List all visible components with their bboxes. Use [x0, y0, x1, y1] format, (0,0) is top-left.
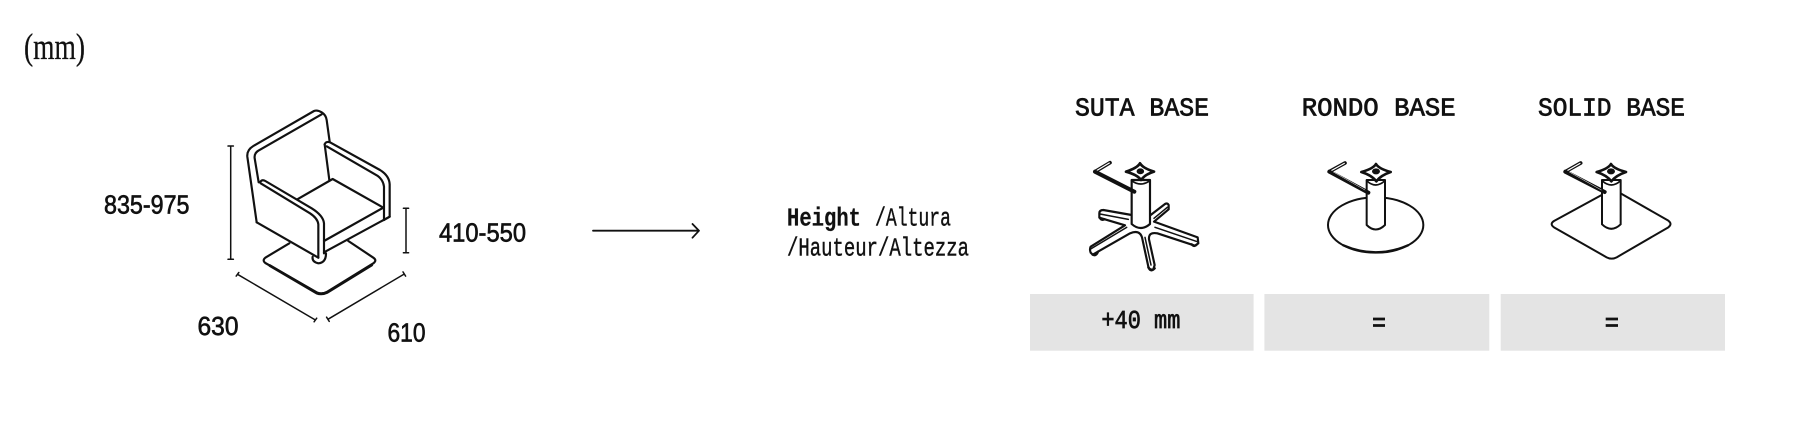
- icon: rondo base: [1328, 163, 1423, 253]
- dimension: width: 610: [388, 318, 426, 348]
- heading: solid base: SOLID BASE: [1538, 94, 1685, 124]
- chair illustration: [247, 111, 390, 294]
- height label: Height: [787, 204, 861, 234]
- height label: [787, 204, 969, 264]
- arrow: [593, 224, 699, 238]
- panel: suta height difference: [1030, 294, 1254, 351]
- panel: rondo height difference: [1264, 294, 1489, 351]
- heading: rondo base: RONDO BASE: [1302, 94, 1456, 124]
- unit label: (mm): [24, 27, 85, 68]
- dimension: total height: 835-975: [104, 189, 190, 219]
- heading: suta base: SUTA BASE: [1075, 94, 1209, 124]
- panel: solid height difference: [1501, 294, 1725, 351]
- dimension: depth: 630: [198, 311, 238, 341]
- icon: suta base: [1090, 163, 1198, 270]
- icon: solid base: [1552, 163, 1670, 259]
- height label: /Hauteur/Altezza: [787, 234, 969, 264]
- dimension lines: [228, 146, 409, 322]
- height label: /Altura: [875, 204, 951, 234]
- dimension: seat height: 410-550: [439, 218, 526, 248]
- panel: suta height difference: +40 mm: [1101, 306, 1180, 336]
